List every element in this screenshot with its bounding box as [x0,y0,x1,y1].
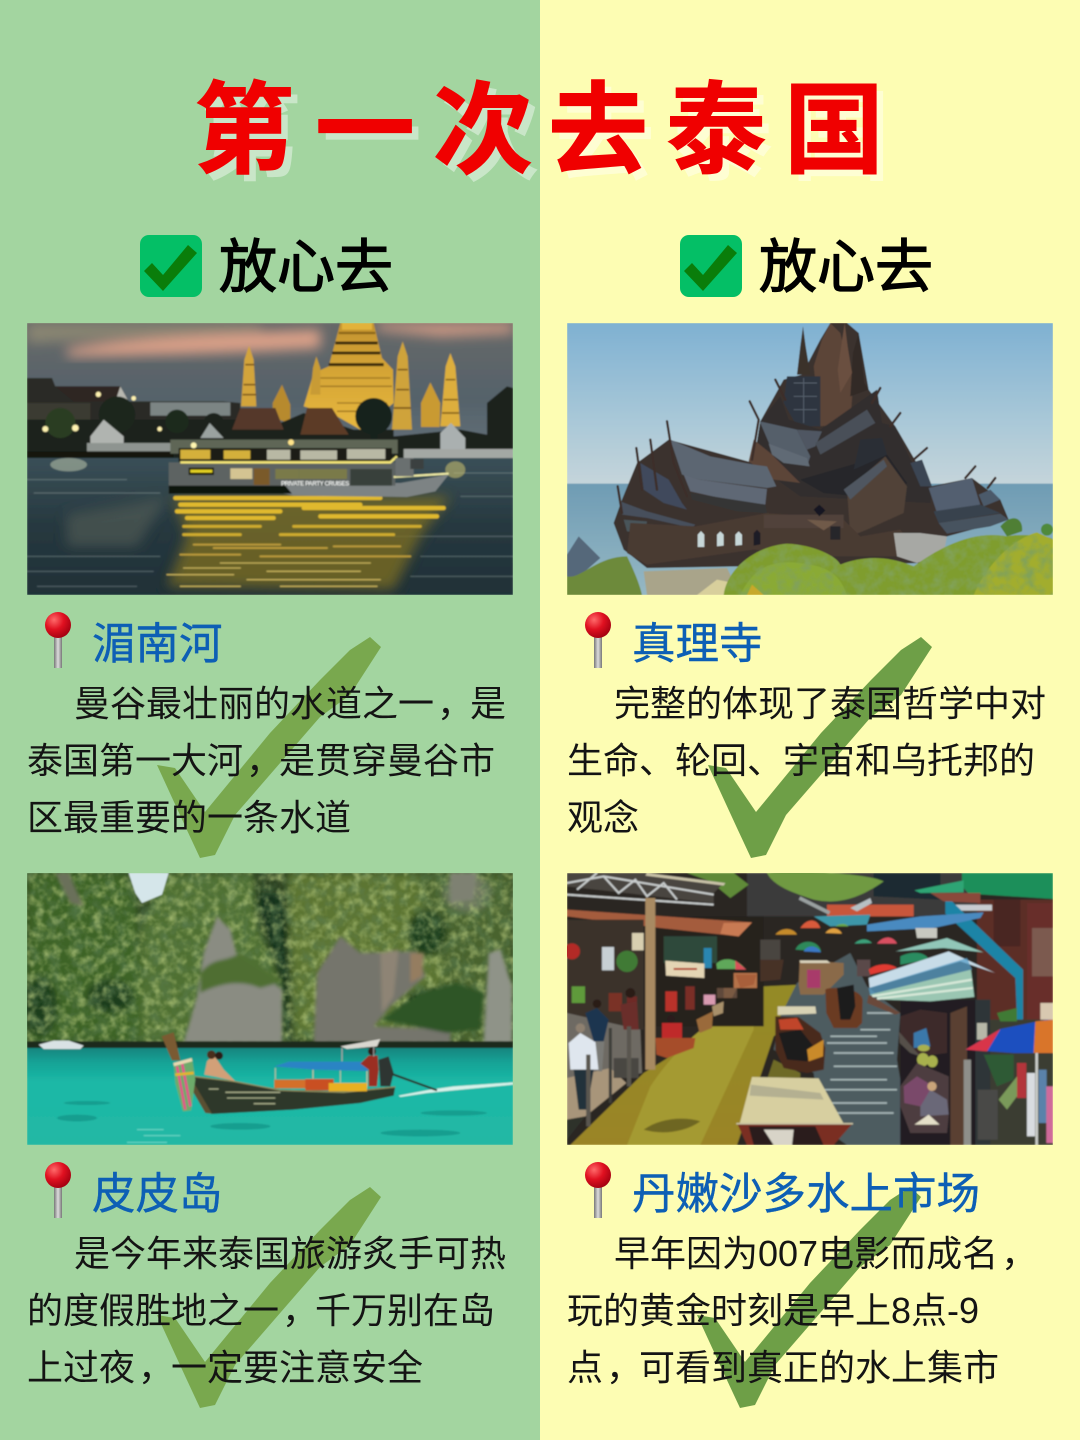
text: Phi Phi description [27,1233,506,1388]
icon: map pin 4 [585,1162,611,1218]
walkway and people [567,1068,626,1120]
title: 去 [548,75,648,187]
text: Sanctuary description: 生命、轮回、宇宙和乌托邦的 [567,740,1035,781]
base hall [627,513,920,565]
text: Sanctuary description: 完整的体现了泰国哲学中对 [614,683,1046,724]
title: 一 [315,75,415,187]
icon: green check box left [140,235,202,297]
long-tail boat [162,1032,180,1060]
panel: left green background [0,0,540,1440]
text: Phi Phi description: 是今年来泰国旅游炙手可热 [74,1233,506,1274]
foliage mottling [27,873,513,1041]
distant umbrellas and boats [800,920,820,928]
ground band and trees [27,413,513,458]
finials [618,380,995,513]
text: Damnoen Saduak description: 玩的黄金时刻是早上8点-9 [567,1290,979,1331]
golden reflection [167,496,450,590]
photo: Phi Phi Island [27,873,513,1145]
limestone rock faces [55,873,512,1043]
photo: Chao Phraya River at night: PRIVATE PARTY CRUISES [281,480,349,487]
photo: Damnoen Saduak floating market [567,873,1053,1145]
temple silhouette [614,323,1009,568]
text: Damnoen Saduak description: 早年因为007电影而成名， [614,1233,1037,1274]
title: 第 [194,75,294,187]
label: Damnoen Saduak: 丹嫩沙多水上市场 [632,1171,980,1219]
title: 国 [784,75,884,187]
icon: green check box right [680,235,742,297]
canal: dark shining water [774,953,900,1145]
water [27,458,513,595]
title [194,75,884,187]
small white boat [39,1041,84,1049]
canopy and cabin [274,1062,370,1071]
water [27,1048,513,1145]
text: Phi Phi description: 上过夜，一定要注意安全 [27,1347,423,1388]
text: Sanctuary description [567,683,1046,838]
distant backdrop [747,873,980,916]
heading: right column: 放心去 [759,235,933,300]
label: Phi Phi Island: 皮皮岛 [92,1171,222,1219]
text: Sanctuary description: 观念 [567,797,639,838]
title: 次 [433,75,533,187]
icon: map pin 3 [45,1162,71,1218]
foreground [567,536,600,580]
right stalls [900,1000,977,1145]
canal: olive water [570,985,814,1145]
foreground boat [740,1077,844,1124]
icon: map pin 1 [45,612,71,668]
canal boats [825,988,863,1028]
paddle boats left [655,1038,695,1058]
passengers [204,1055,235,1081]
photo: Chao Phraya River at night [27,323,513,595]
text: Chao Phraya description [27,683,506,838]
icon: map pin 2 [585,612,611,668]
left stalls [567,916,764,1026]
right wing [929,478,980,513]
far buildings [27,378,240,430]
text: Chao Phraya description: 曼谷最壮丽的水道之一，是 [74,683,506,724]
vendors [665,991,677,1011]
text: Chao Phraya description: 区最重要的一条水道 [27,797,351,838]
text: Chao Phraya description: 泰国第一大河，是贯穿曼谷市 [27,740,495,781]
boat [169,475,449,497]
label: Sanctuary of Truth: 真理寺 [632,621,762,669]
boatman and engine [360,1056,379,1086]
left long roofs [670,440,776,488]
right bottom: clothes and umbrella [990,1020,1053,1145]
central upper roofs [754,390,932,503]
central prang [304,323,394,430]
right side building and roofs [977,900,1053,1023]
side spires [241,346,256,406]
text: Damnoen Saduak description [567,1233,1037,1388]
label: Chao Phraya: 湄南河 [92,621,222,669]
heading: left column: 放心去 [219,235,393,300]
text: Damnoen Saduak description: 点，可看到真正的水上集市 [567,1347,999,1388]
photo: Sanctuary of Truth [567,323,1053,595]
panel: right yellow background [540,0,1080,1440]
spires and central tower [797,326,810,375]
text: Phi Phi description: 的度假胜地之一，千万别在岛 [27,1290,495,1331]
title: 泰 [666,75,766,187]
garland [174,1058,195,1111]
